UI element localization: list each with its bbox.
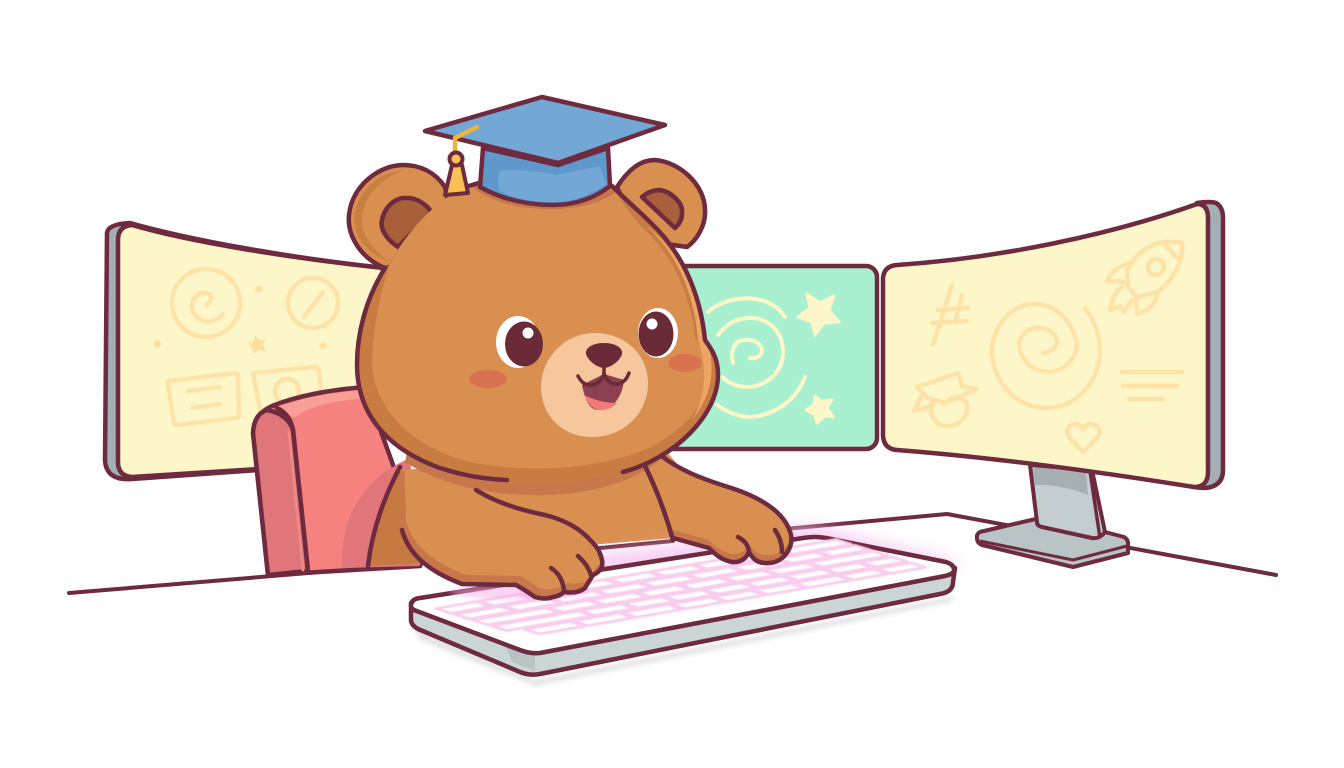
- left arm: [400, 470, 605, 601]
- muzzle: [541, 333, 648, 437]
- center screen icons: [708, 298, 805, 417]
- cap crown: [480, 148, 610, 205]
- keyboard top surface: [411, 537, 954, 653]
- icon: heart: [1068, 424, 1100, 452]
- icon: hash: [932, 285, 968, 345]
- graduation cap: [425, 97, 665, 205]
- keyboard shadow: [412, 596, 955, 686]
- chair: [253, 387, 420, 575]
- right arm: [643, 456, 794, 566]
- nose: [586, 343, 622, 368]
- keyboard glow: [540, 525, 960, 620]
- keyboard front face: [411, 568, 955, 675]
- left monitor: [105, 223, 385, 479]
- cheeks: [469, 354, 702, 388]
- keyboard: [411, 525, 960, 686]
- cap board: [425, 97, 665, 163]
- keyboard keys: [436, 540, 926, 636]
- paw glow: [450, 585, 590, 599]
- illustration: graduate bear at a triple-monitor desk: [67, 94, 1278, 686]
- center monitor: [640, 266, 877, 449]
- left screen icons: [168, 269, 338, 425]
- bear body: [368, 440, 700, 566]
- icon: lines: [1122, 372, 1182, 399]
- cap shadow on head: [470, 182, 618, 209]
- monitor stand: [977, 465, 1128, 567]
- icon: rocket: [1107, 242, 1182, 314]
- right screen icons: [914, 242, 1182, 452]
- bear head: [357, 182, 718, 483]
- desk line: [69, 514, 1276, 593]
- bear ears: [349, 160, 705, 268]
- icon: grad cap: [914, 373, 977, 426]
- right monitor: [883, 202, 1223, 488]
- eyes: [496, 308, 678, 368]
- mouth: [578, 366, 629, 410]
- tassel: [445, 152, 468, 195]
- head outline: [357, 182, 718, 480]
- bear arms and paws: [400, 456, 794, 601]
- tassel string: [455, 127, 477, 153]
